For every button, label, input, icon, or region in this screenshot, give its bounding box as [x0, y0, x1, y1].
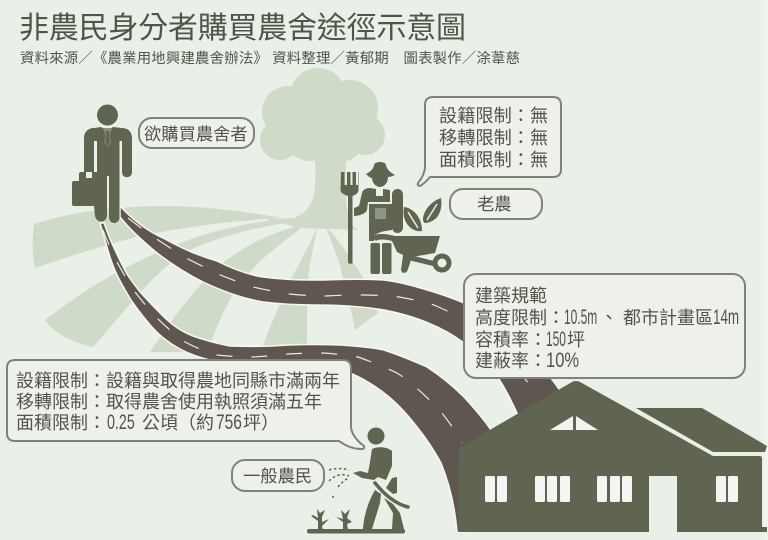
door — [649, 476, 677, 533]
icon: businessman with briefcase — [72, 104, 132, 223]
callout: old farmer restrictions: 設籍限制：無 — [439, 106, 548, 126]
callout: general farmer restrictions: 設籍限制：設籍與取得農地同縣市滿兩年 — [16, 371, 340, 391]
callout: general farmer restrictions: 面積限制： — [16, 413, 106, 433]
label: old farmer: 老農 — [477, 194, 512, 214]
subtitle: source and credits: 資料來源／《農業用地興建農舍辦法》 資料整理／黃郁期 圖表製作／涂葦慈 — [20, 50, 520, 67]
callout: building regulations: 坪 — [567, 330, 585, 350]
legs — [370, 243, 380, 274]
callout: building regulations: 14m — [713, 305, 739, 329]
callout: building regulations: 高度限制： — [475, 308, 565, 328]
callout: building regulations: 建築規範 — [475, 286, 547, 306]
main house body — [458, 381, 767, 532]
callout: general farmer restrictions: 公頃（約 — [142, 413, 214, 433]
field band 5 — [326, 228, 378, 330]
hat and head — [366, 162, 395, 187]
callout: general farmer restrictions: 756 — [216, 410, 242, 434]
plants — [311, 509, 329, 530]
water spray — [329, 468, 349, 487]
callout: building regulations: 容積率： — [475, 330, 547, 350]
callout: building regulations: 10.5m — [564, 306, 597, 329]
upper body and arm — [353, 447, 392, 480]
side roof — [636, 408, 767, 452]
tree and fields background — [33, 68, 385, 352]
hay fork — [340, 172, 358, 264]
label: would-be buyer — [139, 118, 254, 148]
tree trunk — [262, 155, 358, 230]
field band 1 — [33, 206, 282, 268]
hip — [386, 477, 397, 494]
field band 3 — [150, 224, 307, 352]
windows — [485, 476, 738, 502]
callout: building regulations: 都市計畫區 — [623, 308, 713, 328]
house — [458, 381, 767, 533]
title: 非農民身分者購買農舍途徑示意圖 — [19, 12, 466, 45]
front leg — [363, 490, 381, 529]
callout: general farmer restrictions: 坪） — [243, 413, 279, 433]
label: old farmer — [450, 189, 542, 219]
briefcase — [72, 172, 105, 206]
callout: building regulations: 、 — [600, 308, 618, 328]
callout: old farmer restrictions — [418, 97, 561, 186]
callout: building regulations — [464, 274, 745, 378]
gable window — [550, 416, 598, 430]
callout: building regulations: 建蔽率： — [475, 351, 547, 371]
callout: general farmer restrictions — [7, 360, 364, 449]
icon: old farmer with fork and wheelbarrow — [340, 162, 449, 274]
field band 4 — [263, 225, 318, 346]
label: general farmer — [232, 460, 324, 491]
callout: old farmer restrictions: 移轉限制：無 — [439, 128, 548, 148]
wheelbarrow — [373, 234, 440, 273]
road: upper route — [120, 206, 561, 420]
tree crown — [260, 68, 385, 162]
icon: farmer watering plants — [307, 428, 408, 534]
body and arms — [354, 188, 390, 216]
field band 2 — [45, 218, 300, 347]
callout: building regulations: 150 — [546, 328, 566, 351]
leaves — [403, 198, 441, 231]
callout: building regulations: 10% — [546, 349, 579, 373]
label: would-be buyer: 欲購買農舍者 — [144, 124, 248, 144]
ground line — [307, 529, 405, 534]
callout: general farmer restrictions: 移轉限制：取得農舍使用執照須滿五年 — [16, 392, 322, 412]
hose — [375, 483, 408, 507]
label: general farmer: 一般農民 — [243, 466, 312, 486]
road: lower route — [100, 223, 500, 532]
callout: general farmer restrictions: 0.25 — [107, 410, 135, 434]
back leg — [384, 498, 404, 529]
callout: old farmer restrictions: 面積限制：無 — [439, 150, 548, 170]
